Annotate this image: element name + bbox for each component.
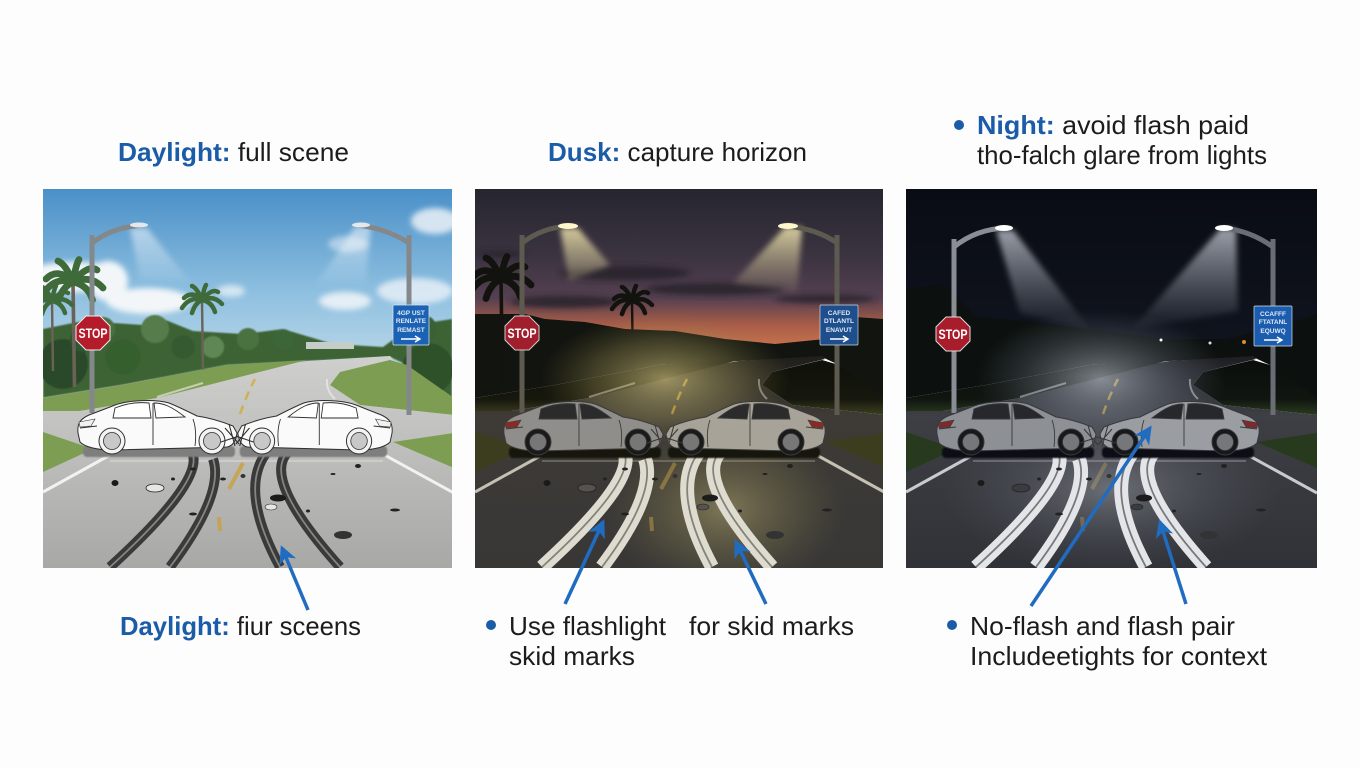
dusk sky (475, 189, 883, 354)
bullet (486, 620, 496, 630)
stop sign: STOP (508, 325, 536, 341)
arrow: dusk left skid mark (565, 522, 603, 604)
arrow: night skid mark (1160, 522, 1186, 604)
street light cones (996, 229, 1238, 329)
right street light (1215, 225, 1273, 415)
night sky (906, 189, 1317, 354)
street light cones (560, 227, 802, 294)
stop sign (76, 316, 110, 350)
arrow: dusk right skid mark (736, 542, 766, 604)
light glow (982, 317, 1239, 554)
debris (112, 464, 400, 539)
car right (1098, 402, 1259, 458)
road and grass (906, 356, 1317, 568)
clouds (23, 208, 459, 314)
heading: dusk: Dusk: capture horizon (548, 137, 807, 167)
night line two: tho-falch glare from lights (977, 140, 1267, 170)
caption: dusk (486, 611, 854, 671)
sky (43, 189, 452, 379)
night caption line two: Includeetights for context (970, 641, 1268, 671)
car left (504, 402, 665, 458)
heading: night (954, 110, 1267, 170)
distant lights (1160, 338, 1246, 344)
blue road sign: CCAFFF (1260, 311, 1286, 318)
road and grass (43, 356, 454, 568)
line-art car right (236, 401, 392, 457)
right street light (778, 223, 837, 415)
debris (978, 464, 1266, 539)
left street light (522, 223, 578, 413)
dusk line one left: Use flashlight (509, 611, 667, 641)
skid marks (110, 452, 340, 567)
blue road sign (1254, 306, 1292, 346)
blue road sign: CAFED (828, 310, 850, 317)
headlight glow (552, 322, 822, 568)
stop sign: STOP (78, 325, 108, 341)
white skid marks (542, 452, 772, 567)
left street light (92, 222, 148, 413)
building (306, 342, 354, 349)
caption: daylight: Daylight: fiur sceens (120, 611, 361, 641)
right street light (352, 222, 409, 415)
blue road sign: RENLATE (396, 318, 427, 325)
debris (544, 464, 832, 539)
white skid marks (976, 452, 1206, 567)
road and grass (475, 356, 886, 568)
caption: night (947, 611, 1268, 671)
line-art car left (78, 401, 239, 457)
treeline (38, 315, 454, 398)
blue road sign: ENAVUT (826, 327, 852, 334)
dark treeline (475, 314, 883, 404)
blue road sign: REMAST (397, 327, 425, 334)
blue road sign (820, 305, 858, 345)
dusk line one right: for skid marks (689, 611, 854, 641)
car right (664, 402, 825, 458)
left street light (954, 225, 1013, 413)
night caption line one: No-flash and flash pair (970, 611, 1235, 641)
panel: night scene (906, 189, 1317, 574)
blue road sign: EQUWQ (1260, 328, 1286, 335)
bullet (947, 620, 957, 630)
heading: daylight: Daylight: full scene (118, 137, 349, 167)
arrow: night car damage (1031, 428, 1150, 606)
arrow: daylight skid mark (282, 548, 308, 610)
panel: daylight scene (23, 189, 459, 568)
stop sign (936, 317, 970, 351)
night line one: Night: avoid flash paid (977, 110, 1249, 140)
blue road sign: 4GP UST (397, 310, 425, 317)
palms (471, 256, 652, 384)
stop sign (505, 316, 539, 350)
palms (32, 260, 222, 387)
stop sign: STOP (938, 326, 968, 342)
car left (937, 402, 1098, 458)
bullet (954, 120, 964, 130)
infographic canvas (43, 115, 1317, 670)
blue road sign (393, 305, 429, 345)
dusk line two: skid marks (509, 641, 635, 671)
dark clouds (475, 251, 875, 308)
blue road sign: FTATANL (1259, 319, 1287, 326)
dark treeline (906, 284, 1317, 404)
panel: dusk scene (471, 189, 886, 594)
street light cones (130, 227, 371, 289)
blue road sign: DTLANTL (824, 318, 854, 325)
